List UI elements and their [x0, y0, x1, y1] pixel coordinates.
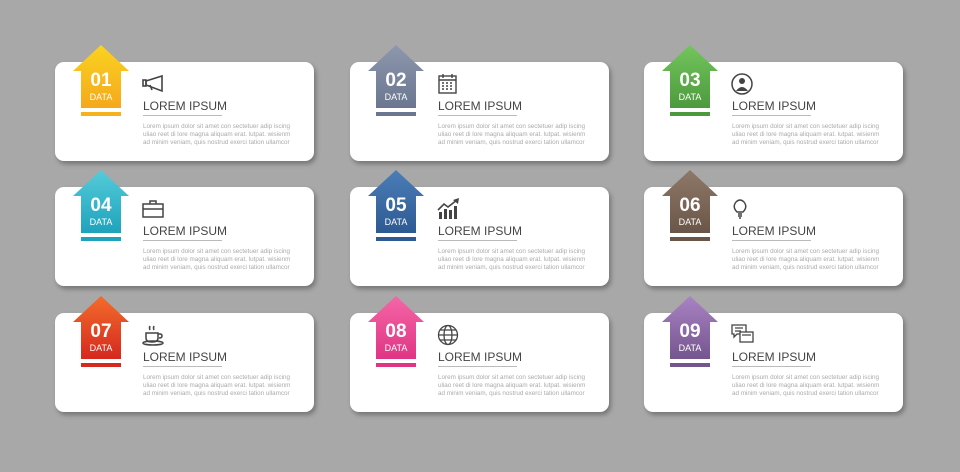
icon: calendar	[438, 74, 457, 94]
block 05: uliao reet di lore magna aliquam erat. lutpat. wisienm	[438, 256, 585, 263]
block 01: 01	[90, 70, 112, 91]
block 08: uliao reet di lore magna aliquam erat. lutpat. wisienm	[438, 382, 585, 389]
block 05: Lorem ipsum dolor sit amet con sectetuer adip iscing	[438, 248, 585, 255]
block 07: uliao reet di lore magna aliquam erat. lutpat. wisienm	[143, 382, 290, 389]
icon: coffee cup	[142, 326, 164, 346]
block 03: ad minim veniam, quis nostrud exerci tation ullamcor	[732, 139, 879, 146]
block 04: DATA	[90, 217, 112, 227]
arrow 02	[368, 45, 424, 116]
block 04: 04	[90, 195, 112, 216]
arrow 08	[368, 296, 424, 367]
block 02: uliao reet di lore magna aliquam erat. lutpat. wisienm	[438, 131, 585, 138]
block 06: uliao reet di lore magna aliquam erat. lutpat. wisienm	[732, 256, 879, 263]
arrow 07	[73, 296, 129, 367]
block 04: ad minim veniam, quis nostrud exerci tation ullamcor	[143, 264, 290, 271]
block 08: ad minim veniam, quis nostrud exerci tation ullamcor	[438, 390, 585, 397]
block 03: LOREM IPSUM	[732, 99, 816, 113]
block 05	[350, 170, 613, 291]
block 09	[644, 296, 907, 417]
block 08: 08	[385, 321, 407, 342]
block 07: Lorem ipsum dolor sit amet con sectetuer adip iscing	[143, 374, 290, 381]
block 02	[350, 45, 613, 166]
block 09: DATA	[679, 343, 701, 353]
block 01	[55, 45, 318, 166]
block 08: LOREM IPSUM	[438, 350, 522, 364]
block 06: Lorem ipsum dolor sit amet con sectetuer adip iscing	[732, 248, 879, 255]
icon: briefcase	[142, 200, 164, 218]
block 07	[55, 296, 318, 417]
arrow 05	[368, 170, 424, 241]
block 04	[55, 170, 318, 291]
block 01: DATA	[90, 92, 112, 102]
arrow 09	[662, 296, 718, 367]
block 01: Lorem ipsum dolor sit amet con sectetuer adip iscing	[143, 123, 290, 130]
block 04: LOREM IPSUM	[143, 224, 227, 238]
block 08	[350, 296, 613, 417]
block 02: DATA	[385, 92, 407, 102]
block 02: Lorem ipsum dolor sit amet con sectetuer adip iscing	[438, 123, 585, 130]
block 04: Lorem ipsum dolor sit amet con sectetuer adip iscing	[143, 248, 290, 255]
block 09: 09	[679, 321, 701, 342]
block 03: uliao reet di lore magna aliquam erat. lutpat. wisienm	[732, 131, 879, 138]
block 07: LOREM IPSUM	[143, 350, 227, 364]
block 03: DATA	[679, 92, 701, 102]
block 03: Lorem ipsum dolor sit amet con sectetuer adip iscing	[732, 123, 879, 130]
block 06: ad minim veniam, quis nostrud exerci tation ullamcor	[732, 264, 879, 271]
icon: globe	[438, 324, 458, 346]
block 05: LOREM IPSUM	[438, 224, 522, 238]
arrow 06	[662, 170, 718, 241]
block 09: LOREM IPSUM	[732, 350, 816, 364]
arrow 04	[73, 170, 129, 241]
block 02: LOREM IPSUM	[438, 99, 522, 113]
block 04: uliao reet di lore magna aliquam erat. lutpat. wisienm	[143, 256, 290, 263]
block 07: ad minim veniam, quis nostrud exerci tation ullamcor	[143, 390, 290, 397]
block 06: DATA	[679, 217, 701, 227]
block 02: 02	[385, 70, 407, 91]
icon: growth chart	[438, 198, 459, 219]
icon: light bulb	[734, 199, 746, 219]
icon: chat bubbles	[731, 324, 754, 343]
icon: megaphone	[142, 74, 163, 92]
block 08: DATA	[385, 343, 407, 353]
block 09: Lorem ipsum dolor sit amet con sectetuer adip iscing	[732, 374, 879, 381]
block 07: 07	[90, 321, 112, 342]
block 05: DATA	[385, 217, 407, 227]
icon: person circle	[731, 73, 753, 95]
block 03	[644, 45, 907, 166]
arrow 01	[73, 45, 129, 116]
block 05: 05	[385, 195, 407, 216]
block 05: ad minim veniam, quis nostrud exerci tation ullamcor	[438, 264, 585, 271]
block 09: ad minim veniam, quis nostrud exerci tation ullamcor	[732, 390, 879, 397]
block 08: Lorem ipsum dolor sit amet con sectetuer adip iscing	[438, 374, 585, 381]
arrow 03	[662, 45, 718, 116]
block 09: uliao reet di lore magna aliquam erat. lutpat. wisienm	[732, 382, 879, 389]
block 06	[644, 170, 907, 291]
block 01: ad minim veniam, quis nostrud exerci tation ullamcor	[143, 139, 290, 146]
block 01: uliao reet di lore magna aliquam erat. lutpat. wisienm	[143, 131, 290, 138]
block 06: LOREM IPSUM	[732, 224, 816, 238]
block 03: 03	[679, 70, 701, 91]
block 07: DATA	[90, 343, 112, 353]
block 02: ad minim veniam, quis nostrud exerci tation ullamcor	[438, 139, 585, 146]
block 06: 06	[679, 195, 701, 216]
block 01: LOREM IPSUM	[143, 99, 227, 113]
